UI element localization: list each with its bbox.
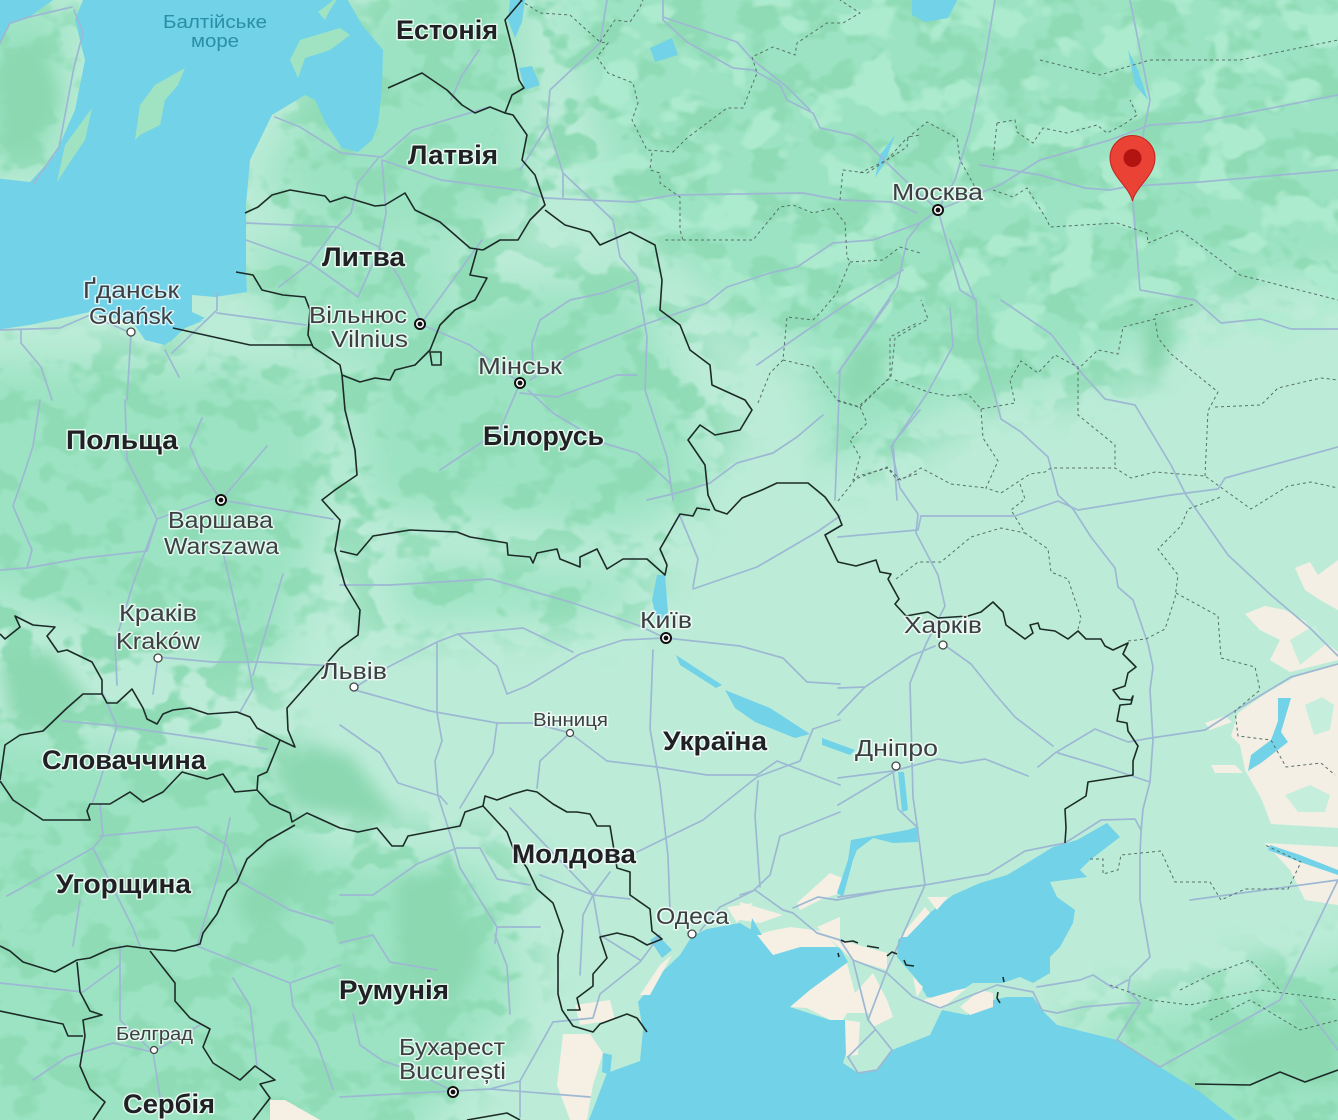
city labels: Gdańsk xyxy=(89,303,174,329)
city labels: Москва xyxy=(892,179,983,205)
country labels: Молдова xyxy=(512,839,637,869)
city labels: Київ xyxy=(640,607,692,633)
country labels: Латвія xyxy=(408,140,498,170)
country labels: Литва xyxy=(322,242,406,272)
city labels: Мінськ xyxy=(478,353,563,379)
icon: red location pin xyxy=(1110,136,1155,201)
country labels: Естонія xyxy=(396,15,498,45)
Black Sea xyxy=(587,923,1242,1120)
Baltic Sea xyxy=(0,0,383,342)
country labels: Польща xyxy=(66,425,179,455)
administrative dashed borders xyxy=(520,0,1338,1030)
country labels: Білорусь xyxy=(483,421,604,451)
city labels: Белград xyxy=(116,1024,194,1044)
city labels: București xyxy=(399,1058,506,1084)
city labels: Вільнюс xyxy=(309,302,407,328)
city labels: Warszawa xyxy=(164,533,279,559)
city labels: Vilnius xyxy=(331,326,408,352)
city labels: Варшава xyxy=(168,507,273,533)
green patches in dry land xyxy=(1285,625,1334,812)
city labels: Харків xyxy=(904,612,982,638)
city labels: Ґданськ xyxy=(83,276,180,303)
Baltic islands xyxy=(57,0,350,182)
country labels: Румунія xyxy=(339,975,449,1005)
city markers xyxy=(127,205,947,1097)
city labels: Бухарест xyxy=(399,1034,505,1060)
sea label: Балтійське xyxy=(163,12,267,32)
right-side dry land xyxy=(1205,560,1338,905)
city labels: Вінниця xyxy=(533,710,608,730)
city labels: Краків xyxy=(119,600,197,626)
city labels: Львів xyxy=(321,658,387,684)
city labels: Одеса xyxy=(656,903,729,929)
city labels: Kraków xyxy=(116,628,200,654)
country labels: Сербія xyxy=(123,1089,215,1119)
country labels: Україна xyxy=(663,726,768,756)
sand coast xyxy=(270,873,993,1120)
city labels: Дніпро xyxy=(855,735,938,761)
country labels: Словаччина xyxy=(42,745,207,775)
country labels xyxy=(42,15,768,1119)
sea label xyxy=(163,12,267,51)
Sea of Azov xyxy=(897,823,1120,1000)
sea label: море xyxy=(191,31,239,51)
city labels xyxy=(83,179,983,1084)
country labels: Угорщина xyxy=(56,869,192,899)
